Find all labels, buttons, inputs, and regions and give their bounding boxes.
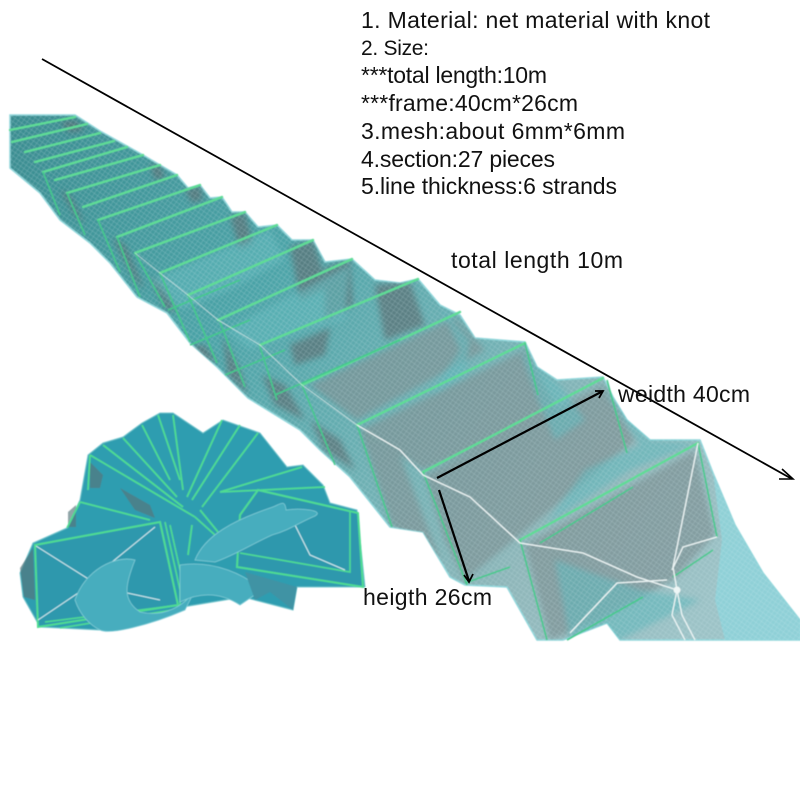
white net ropes	[135, 253, 717, 640]
bundle silhouette	[20, 413, 365, 630]
net body	[10, 115, 800, 640]
loose folded netting	[75, 503, 317, 631]
width arrow	[437, 391, 603, 478]
grey near-section panels	[310, 318, 715, 640]
spec line 6: 4.section:27 pieces	[361, 146, 555, 172]
green frame top rails	[10, 117, 698, 540]
label: height: heigth 26cm	[363, 584, 492, 610]
teal funnel net overlays	[150, 230, 700, 640]
spec line 3: ***total length:10m	[361, 62, 547, 88]
infographic canvas	[8, 11, 800, 642]
spec line 5: 3.mesh:about 6mm*6mm	[361, 118, 625, 144]
label: total length: total length 10m	[451, 247, 623, 273]
long stretched fishing net	[0, 100, 800, 640]
green frame uprights and lower rails	[43, 172, 717, 640]
folded net bundle	[20, 413, 365, 631]
spec line 2: 2. Size:	[361, 37, 429, 60]
fanned green frames	[67, 415, 325, 555]
dark inner net panels	[60, 120, 715, 640]
total length arrow	[42, 59, 793, 479]
height arrow	[439, 490, 473, 582]
mesh texture	[0, 100, 800, 640]
label: width: weidth 40cm	[617, 381, 750, 407]
hanging net tail	[245, 572, 297, 610]
spec line 4: ***frame:40cm*26cm	[361, 90, 578, 116]
spec line 7: 5.line thickness:6 strands	[361, 173, 617, 199]
front-left frame	[35, 522, 186, 628]
spec line 1: 1. Material: net material with knot	[361, 7, 711, 33]
bundle shadow patches	[20, 462, 155, 600]
light cyan outer mesh tail	[713, 473, 800, 640]
specification list	[361, 7, 711, 199]
front-right frame	[237, 490, 363, 587]
